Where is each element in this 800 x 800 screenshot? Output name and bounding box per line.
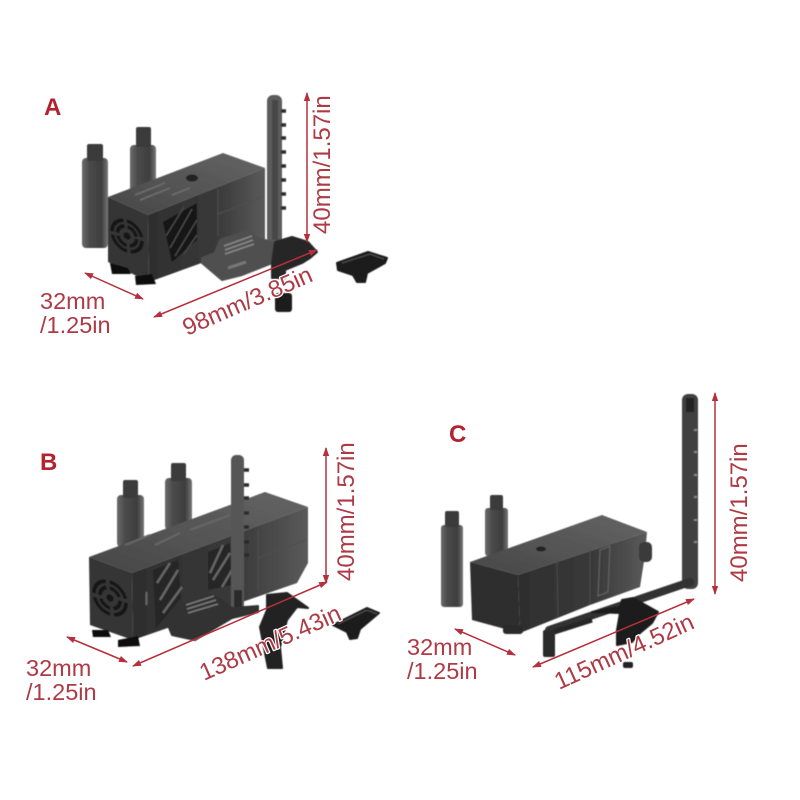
arrow: C depth <box>455 629 515 655</box>
label: C depth: 32mm <box>407 634 472 660</box>
heading: A: A <box>44 94 61 121</box>
product illustration A <box>82 95 387 312</box>
panel: product A <box>40 93 387 342</box>
label: C depth: /1.25in <box>407 658 478 684</box>
arrow: B height <box>325 448 327 583</box>
label: B length: 138mm/5.43in <box>195 600 345 686</box>
label: B depth: 32mm <box>26 655 91 681</box>
label: A depth: /1.25in <box>40 312 111 338</box>
arrow: C height <box>714 393 716 594</box>
heading: C: C <box>449 421 466 448</box>
label: A length: 98mm/3.85in <box>179 261 317 342</box>
arrow: A depth <box>85 273 143 299</box>
label: B height: 40mm/1.57in <box>333 442 360 581</box>
label: C height: 40mm/1.57in <box>726 443 753 582</box>
arrow: B depth <box>67 637 127 662</box>
arrow: A length <box>154 250 317 317</box>
label: A depth: 32mm <box>40 288 105 314</box>
label: C length: 115mm/4.52in <box>550 609 698 695</box>
panel: product C <box>407 393 753 695</box>
heading: B: B <box>40 449 57 476</box>
product illustration C <box>441 394 698 668</box>
panel: product B <box>26 442 379 705</box>
arrow: B length <box>133 582 327 666</box>
arrow: C length <box>533 599 694 667</box>
product illustration B <box>89 455 379 668</box>
label: A height: 40mm/1.57in <box>309 95 336 234</box>
label: B depth: /1.25in <box>26 679 97 705</box>
arrow: A height <box>306 93 308 242</box>
